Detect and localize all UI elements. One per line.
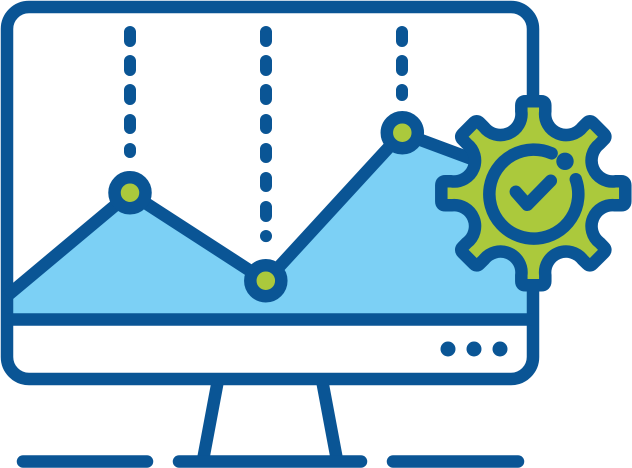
icon: gear with check mark (441, 101, 625, 285)
monitor control dots (440, 342, 508, 356)
check mark (516, 181, 551, 205)
monitor stand (203, 380, 337, 460)
monitor frame (7, 7, 533, 379)
gear dot (556, 153, 574, 170)
data point 2 (250, 265, 281, 296)
base lines (23, 455, 518, 468)
dashed guide lines (130, 32, 402, 236)
chart line (7, 133, 480, 296)
gear body (441, 101, 625, 285)
data point 1 (114, 177, 146, 208)
gear ring (489, 150, 578, 239)
chart: blue area under line (7, 133, 533, 320)
data point 3 (387, 117, 418, 148)
